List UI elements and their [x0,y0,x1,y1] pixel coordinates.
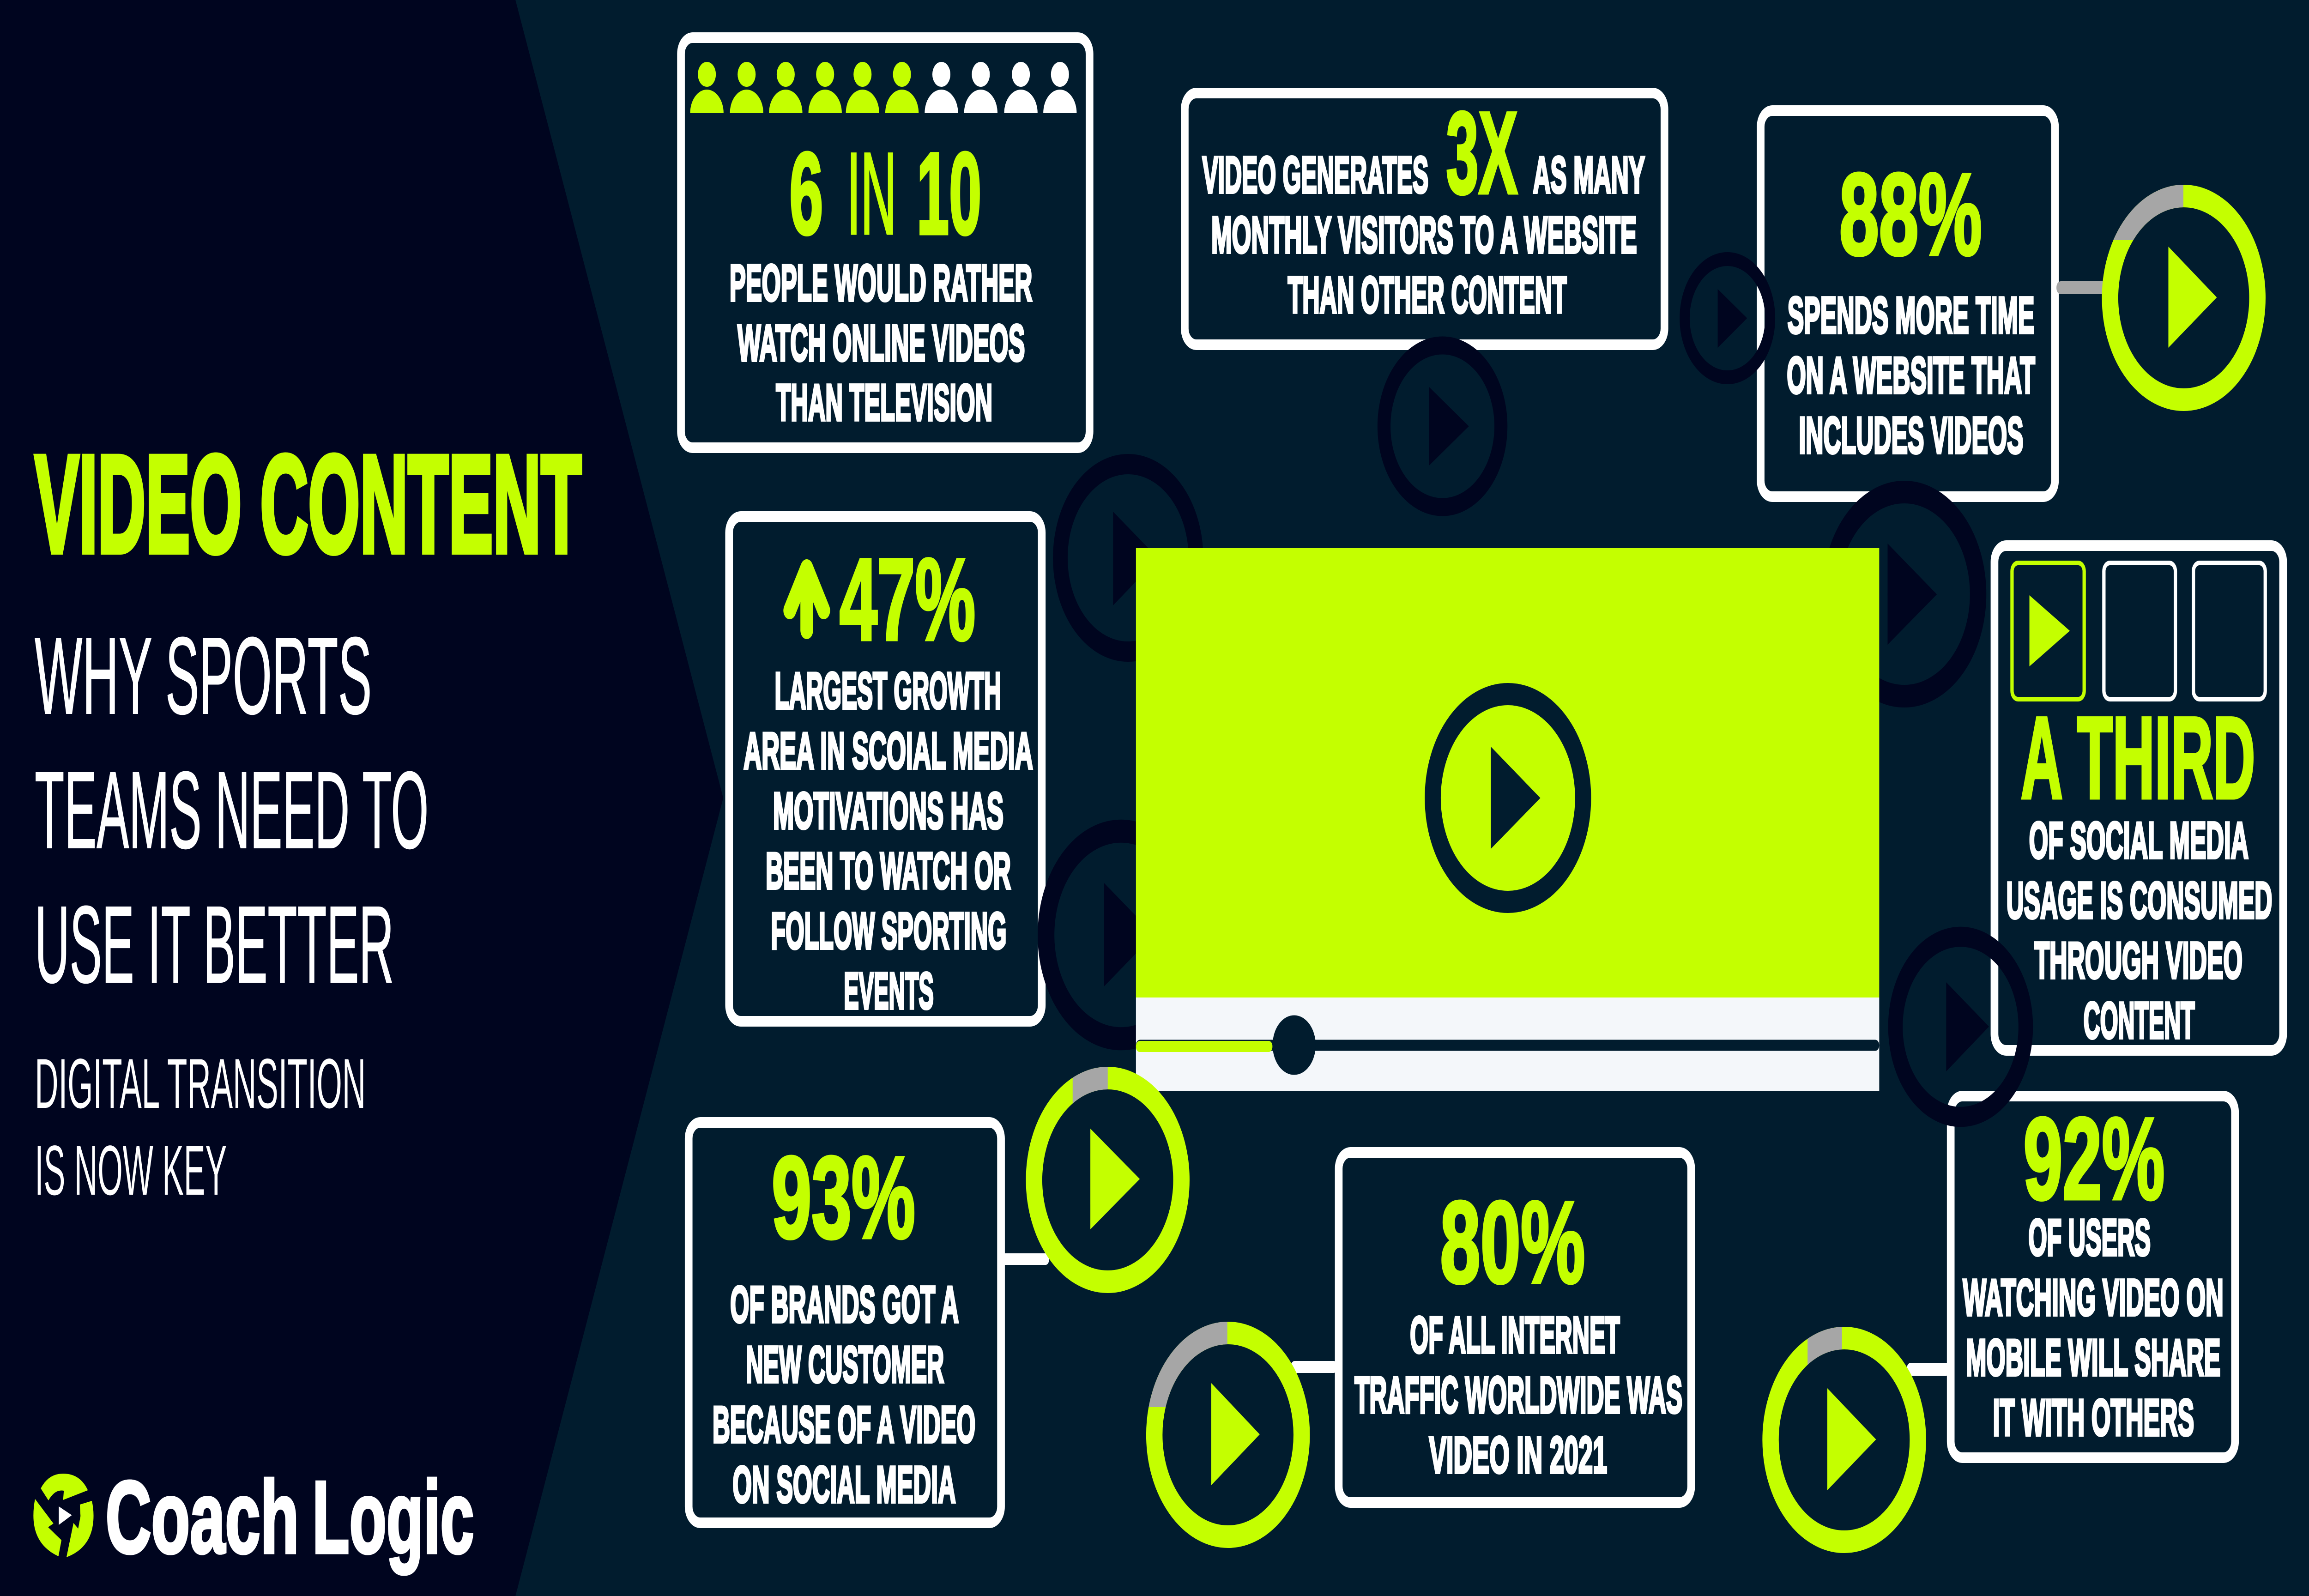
subheading: TEAMS NEED TO [35,749,429,871]
connector: 93% [1002,1253,1049,1265]
text: mobile users share [1963,1209,2224,1446]
text: time on website: INCLUDES VIDEOS [1799,406,2024,464]
logo: Coach Logic: Logic [312,1461,474,1575]
text: growth area: MOTIVATIONS HAS [773,782,1003,840]
stat: 6 in 10: 10 [917,128,981,259]
stat: 92%: 92% [2024,1094,2164,1224]
text: online videos over television: THAN TELEVISION [776,374,992,431]
panel: 92% [1951,1094,2235,1457]
connector: 80% [1291,1361,1337,1373]
text: growth area: EVENTS [844,962,934,1020]
text: internet traffic: OF ALL INTERNET [1410,1306,1620,1364]
text: internet traffic: VIDEO IN 2021 [1429,1426,1607,1484]
logo: Coach Logic: Coach [106,1461,299,1575]
stat: 80%: 80% [1440,1177,1585,1307]
connector: 88% [2056,281,2107,294]
icon: 93% progress ring [1034,1078,1181,1282]
stat: 88%: 88% [1839,149,1982,279]
panel: 80% [1339,1153,1691,1503]
icon: 88% progress ring [2110,196,2257,400]
stat: 6 in 10 [789,128,981,259]
video player [1136,548,1879,1091]
icon: dark play ring, between 3X and 88% panels [1685,259,1770,377]
text: video generates 3X: 3X [1446,88,1517,218]
text: time on website: ON A WEBSITE THAT [1787,346,2035,404]
progress track [1136,1040,1879,1051]
left panel [0,0,723,1596]
text: video generates 3X: MONTHLY VISITORS TO A WEBSITE [1211,206,1637,264]
icon: three video frames [2012,563,2265,699]
icon: dark play ring, left of video bottom [1046,831,1196,1039]
text: video generates 3X: VIDEO GENERATES [1202,146,1428,204]
text: internet traffic [1354,1306,1682,1484]
tagline: IS NOW KEY [35,1131,227,1210]
icon: 80% progress ring [1154,1333,1302,1537]
icon: dark play ring, left of video top [1060,464,1196,652]
text: mobile users share: IT WITH OTHERS [1993,1389,2194,1446]
text: growth area: BEEN TO WATCH OR [766,842,1011,900]
icon: dark play ring, below 3X panel [1384,345,1501,507]
panel: 93% [689,1122,1001,1523]
text: online videos over television: PEOPLE WOULD RATHER [730,254,1032,312]
text: social media usage: CONTENT [2084,991,2195,1049]
text: growth area: FOLLOW SPORTING [771,902,1007,960]
text: new customer: NEW CUSTOMER [746,1336,944,1393]
text: video generates 3X: THAN OTHER CONTENT [1288,266,1567,324]
text: video generates 3X [1202,88,1645,324]
text: mobile users share: OF USERS [2028,1209,2151,1266]
panel: 47% [729,516,1042,1022]
subheading [35,615,429,1005]
tagline: DIGITAL TRANSITION [35,1044,366,1123]
text: social media usage [2007,811,2272,1049]
progress knob [1273,1015,1316,1075]
stat: 47%: 47% [840,534,975,665]
icon: up arrow [790,568,824,630]
subheading: WHY SPORTS [35,615,372,737]
text: time on website [1787,286,2035,464]
text: online videos over television [730,254,1032,431]
icon: 92% progress ring [1771,1338,1918,1542]
panel: a third [1995,546,2283,1050]
heading: video content: VIDEO CONTENT [35,427,581,581]
icon: central play button [1433,694,1583,902]
text: online videos over television: WATCH ONLINE VIDEOS [737,314,1025,372]
text: new customer: ON SOCIAL MEDIA [732,1456,956,1513]
tagline [35,1044,366,1210]
logo: Coach Logic [33,1461,474,1575]
panel: 88% [1761,111,2055,497]
text: new customer: OF BRANDS GOT A [730,1276,959,1333]
progress fill [1136,1041,1272,1052]
text: video generates 3X: AS MANY [1533,146,1645,204]
icon: row of ten people [690,62,1076,113]
text: internet traffic: TRAFFIC WORLDWIDE WAS [1354,1366,1682,1424]
icon: dark play ring, right of video [1895,937,2026,1117]
subheading: USE IT BETTER [35,883,394,1005]
text: new customer: BECAUSE OF A VIDEO [713,1396,975,1453]
text: time on website: SPENDS MORE TIME [1788,286,2034,344]
stat: 6 in 10: IN [847,128,897,259]
stat: 93%: 93% [772,1132,915,1263]
stat: 6 in 10: 6 [789,128,823,259]
panel: 3X monthly visitors [1185,88,1664,345]
text: growth area: AREA IN SCOIAL MEDIA [743,722,1033,780]
icon: dark play ring, above video right [1831,492,1978,696]
connector: 92% [1907,1363,1950,1376]
text: new customer [713,1276,975,1513]
panel: 6 in 10 [681,38,1089,448]
text: growth area: LARGEST GROWTH [775,662,1001,719]
text: growth area [743,662,1033,1020]
